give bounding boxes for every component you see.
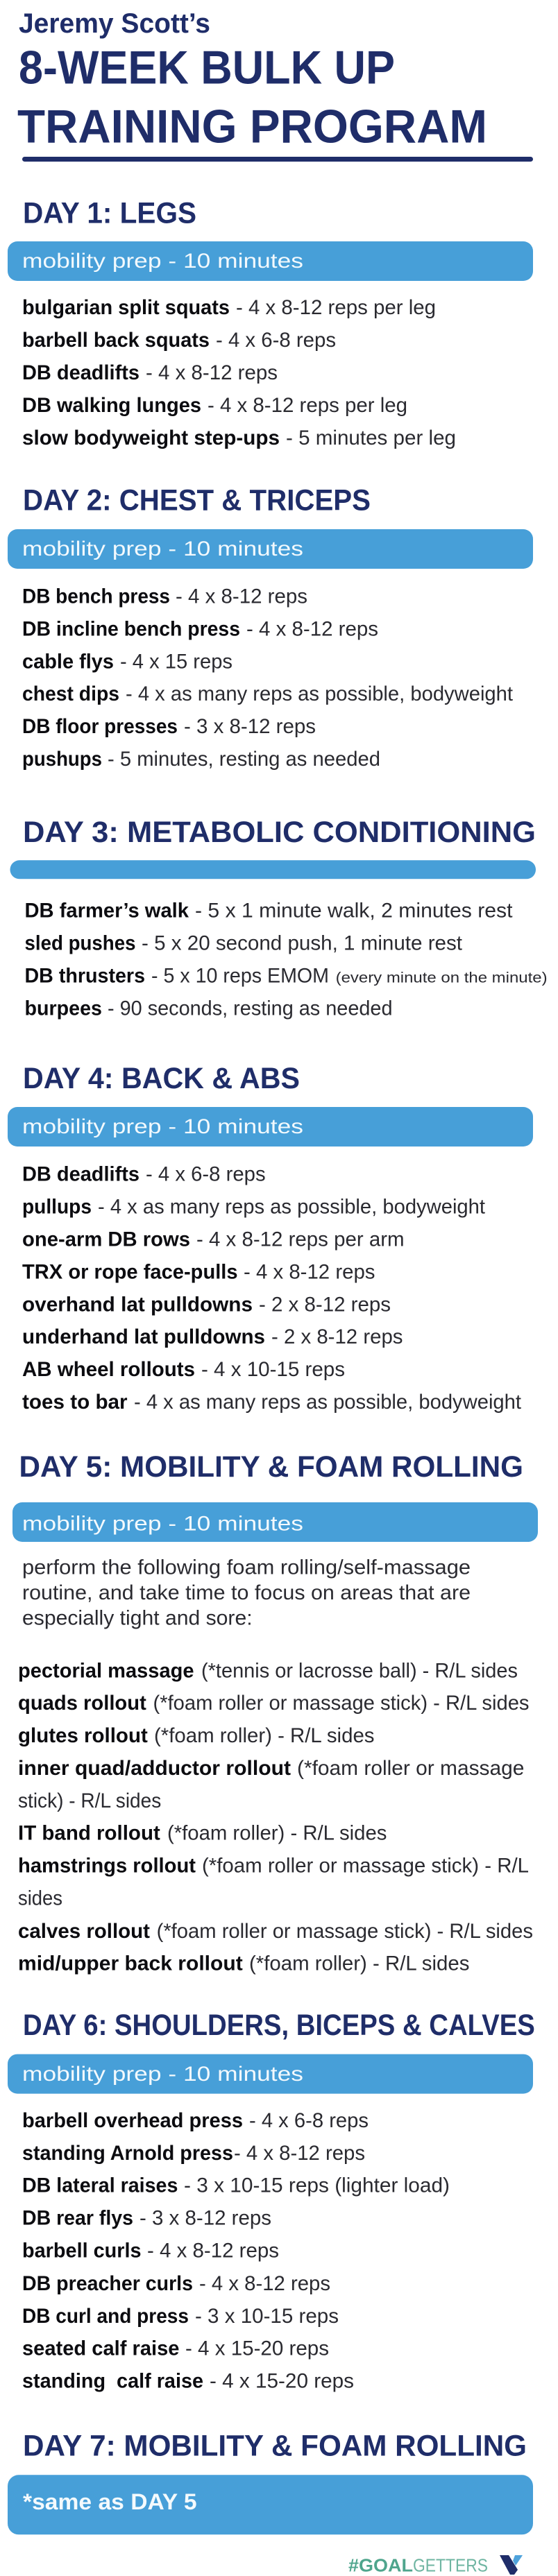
exercise list: - 4 x 8-12 reps	[176, 585, 307, 608]
exercise list: - 4 x 15-20 reps	[210, 2370, 354, 2393]
mobility prep bar	[8, 2054, 533, 2094]
mobility prep bar	[8, 1107, 533, 1147]
exercise list: - 4 x 6-8 reps	[249, 2109, 369, 2132]
exercise list: barbell curls	[22, 2240, 142, 2262]
rollout list: (*foam roller) - R/L sides	[167, 1822, 387, 1845]
instructions	[22, 1556, 471, 1629]
exercise list: (every minute on the minute)	[336, 970, 548, 986]
exercise list: one-arm DB rows	[22, 1228, 190, 1251]
rollout list	[18, 1659, 533, 1975]
exercise list: seated calf raise	[22, 2337, 179, 2360]
exercise list: - 2 x 8-12 reps	[259, 1293, 391, 1316]
exercise list: - 4 x 8-12 reps per arm	[196, 1228, 405, 1251]
exercise list: DB deadlifts	[22, 361, 140, 384]
rollout list: mid/upper back rollout	[18, 1952, 243, 1975]
exercise list: DB floor presses	[22, 715, 178, 738]
exercise list: - 2 x 8-12 reps	[271, 1325, 403, 1348]
mobility prep bar	[8, 529, 533, 569]
exercise list: DB rear flys	[22, 2207, 133, 2230]
mobility prep bar: mobility prep - 10 minutes	[22, 1115, 303, 1138]
same as day 5 box	[8, 2475, 533, 2534]
exercise list: - 4 x 6-8 reps	[216, 329, 336, 352]
mobility prep bar: mobility prep - 10 minutes	[22, 250, 303, 273]
heading: day 5: DAY 5: MOBILITY & FOAM ROLLING	[19, 1450, 523, 1484]
panel: day 7	[8, 2429, 533, 2534]
exercise list: barbell overhead press	[22, 2109, 243, 2132]
exercise list: slow bodyweight step-ups	[22, 427, 280, 449]
exercise list: - 5 minutes, resting as needed	[108, 748, 380, 771]
same as day 5 box: *same as DAY 5	[23, 2489, 197, 2514]
title line 2: TRAINING PROGRAM	[17, 100, 487, 153]
byline: Jeremy Scott’s	[19, 8, 210, 39]
exercise list: TRX or rope face-pulls	[22, 1260, 238, 1283]
exercise list: - 4 x 6-8 reps	[146, 1163, 266, 1186]
heading: day 4: DAY 4: BACK & ABS	[23, 1062, 300, 1095]
rollout list: inner quad/adductor rollout	[18, 1757, 291, 1780]
exercise list: standing Arnold press	[22, 2142, 233, 2165]
footer hashtag: #GOAL	[348, 2555, 413, 2576]
heading: day 1: DAY 1: LEGS	[23, 197, 196, 230]
exercise list	[25, 899, 548, 1020]
rollout list: IT band rollout	[18, 1822, 160, 1845]
exercise list: standing calf raise	[22, 2370, 203, 2393]
exercise list: - 3 x 8-12 reps	[140, 2207, 271, 2230]
title rule	[22, 157, 533, 162]
footer hashtag: GETTERS	[413, 2555, 488, 2576]
rollout list: (*foam roller or massage stick) - R/L sides	[157, 1920, 533, 1943]
exercise list: - 4 x as many reps as possible, bodyweight	[126, 682, 514, 705]
instructions: routine, and take time to focus on areas that are	[22, 1581, 471, 1604]
panel: day 4	[8, 1062, 533, 1414]
panel: day 3	[10, 816, 548, 1020]
exercise list	[22, 1163, 522, 1414]
exercise list: - 5 minutes per leg	[286, 427, 456, 449]
exercise list: pullups	[22, 1196, 92, 1218]
exercise list: DB farmer’s walk	[25, 899, 189, 922]
exercise list: chest dips	[22, 682, 119, 705]
exercise list: - 4 x 8-12 reps per leg	[236, 296, 436, 319]
exercise list: - 4 x as many reps as possible, bodyweight	[134, 1391, 522, 1414]
exercise list: burpees	[25, 997, 102, 1020]
mobility prep bar	[12, 1502, 538, 1542]
rollout list: pectorial massage	[18, 1659, 194, 1682]
exercise list: sled pushes	[25, 931, 136, 954]
exercise list: toes to bar	[22, 1391, 128, 1414]
rollout list: (*foam roller or massage stick) - R/L sides	[153, 1692, 529, 1715]
exercise list: - 4 x 8-12 reps	[234, 2142, 365, 2165]
heading: day 7: DAY 7: MOBILITY & FOAM ROLLING	[23, 2429, 527, 2462]
exercise list: - 4 x 8-12 reps per leg	[208, 394, 407, 417]
panel: day 5	[12, 1450, 538, 1975]
exercise list	[22, 585, 514, 771]
rollout list: (*foam roller or massage stick) - R/L	[202, 1855, 529, 1878]
heading: day 2: DAY 2: CHEST & TRICEPS	[23, 484, 371, 517]
rollout list: calves rollout	[18, 1920, 150, 1943]
rollout list: (*tennis or lacrosse ball) - R/L sides	[201, 1659, 518, 1682]
exercise list: DB deadlifts	[22, 1163, 140, 1186]
exercise list	[22, 296, 456, 449]
footer hashtag	[348, 2555, 488, 2576]
exercise list: underhand lat pulldowns	[22, 1325, 265, 1348]
exercise list: - 5 x 20 second push, 1 minute rest	[142, 931, 463, 954]
exercise list: DB curl and press	[22, 2305, 189, 2328]
exercise list: - 3 x 10-15 reps	[195, 2305, 339, 2328]
exercise list: pushups	[22, 748, 102, 771]
rollout list: quads rollout	[18, 1692, 146, 1715]
rollout list: glutes rollout	[18, 1724, 148, 1747]
exercise list: - 4 x 10-15 reps	[201, 1358, 345, 1381]
exercise list: - 4 x 8-12 reps	[199, 2272, 330, 2295]
exercise list: DB preacher curls	[22, 2272, 193, 2295]
mobility prep bar: mobility prep - 10 minutes	[22, 538, 303, 560]
exercise list: - 4 x 8-12 reps	[147, 2240, 279, 2262]
exercise list: - 4 x 8-12 reps	[146, 361, 278, 384]
exercise list: overhand lat pulldowns	[22, 1293, 253, 1316]
exercise list: DB incline bench press	[22, 617, 240, 640]
exercise list: - 3 x 10-15 reps (lighter load)	[184, 2174, 450, 2197]
instructions: perform the following foam rolling/self-massage	[22, 1556, 471, 1579]
rollout list: sides	[18, 1887, 62, 1909]
exercise list: - 4 x 8-12 reps	[244, 1260, 375, 1283]
exercise list: - 4 x as many reps as possible, bodyweight	[98, 1196, 486, 1218]
mobility prep bar	[8, 241, 533, 281]
icon: V logo	[500, 2555, 523, 2575]
empty bar	[10, 860, 536, 879]
rollout list: (*foam roller) - R/L sides	[154, 1724, 375, 1747]
rollout list: hamstrings rollout	[18, 1855, 196, 1878]
rollout list: (*foam roller) - R/L sides	[249, 1952, 469, 1975]
exercise list: bulgarian split squats	[22, 296, 230, 319]
exercise list: DB lateral raises	[22, 2174, 178, 2197]
exercise list: - 90 seconds, resting as needed	[108, 997, 393, 1020]
title line 1: 8-WEEK BULK UP	[19, 42, 395, 94]
exercise list: - 4 x 8-12 reps	[246, 617, 378, 640]
exercise list: - 4 x 15-20 reps	[185, 2337, 329, 2360]
instructions: especially tight and sore:	[22, 1606, 253, 1629]
header	[17, 8, 533, 162]
exercise list: - 3 x 8-12 reps	[184, 715, 316, 738]
exercise list: DB walking lunges	[22, 394, 201, 417]
exercise list	[22, 2109, 450, 2393]
panel: day 2	[8, 484, 533, 771]
exercise list: cable flys	[22, 650, 114, 673]
rollout list: stick) - R/L sides	[18, 1789, 161, 1812]
heading: day 3: DAY 3: METABOLIC CONDITIONING	[23, 816, 536, 849]
exercise list: DB bench press	[22, 585, 170, 608]
exercise list: barbell back squats	[22, 329, 210, 352]
exercise list: - 5 x 10 reps EMOM	[151, 964, 329, 987]
exercise list: DB thrusters	[25, 964, 145, 987]
mobility prep bar: mobility prep - 10 minutes	[22, 2063, 303, 2086]
exercise list: - 4 x 15 reps	[120, 650, 232, 673]
panel: day 6	[8, 2009, 535, 2393]
exercise list: - 5 x 1 minute walk, 2 minutes rest	[195, 899, 513, 922]
exercise list: AB wheel rollouts	[22, 1358, 195, 1381]
mobility prep bar: mobility prep - 10 minutes	[22, 1513, 303, 1536]
rollout list: (*foam roller or massage	[297, 1757, 524, 1780]
panel: day 1	[8, 197, 533, 449]
